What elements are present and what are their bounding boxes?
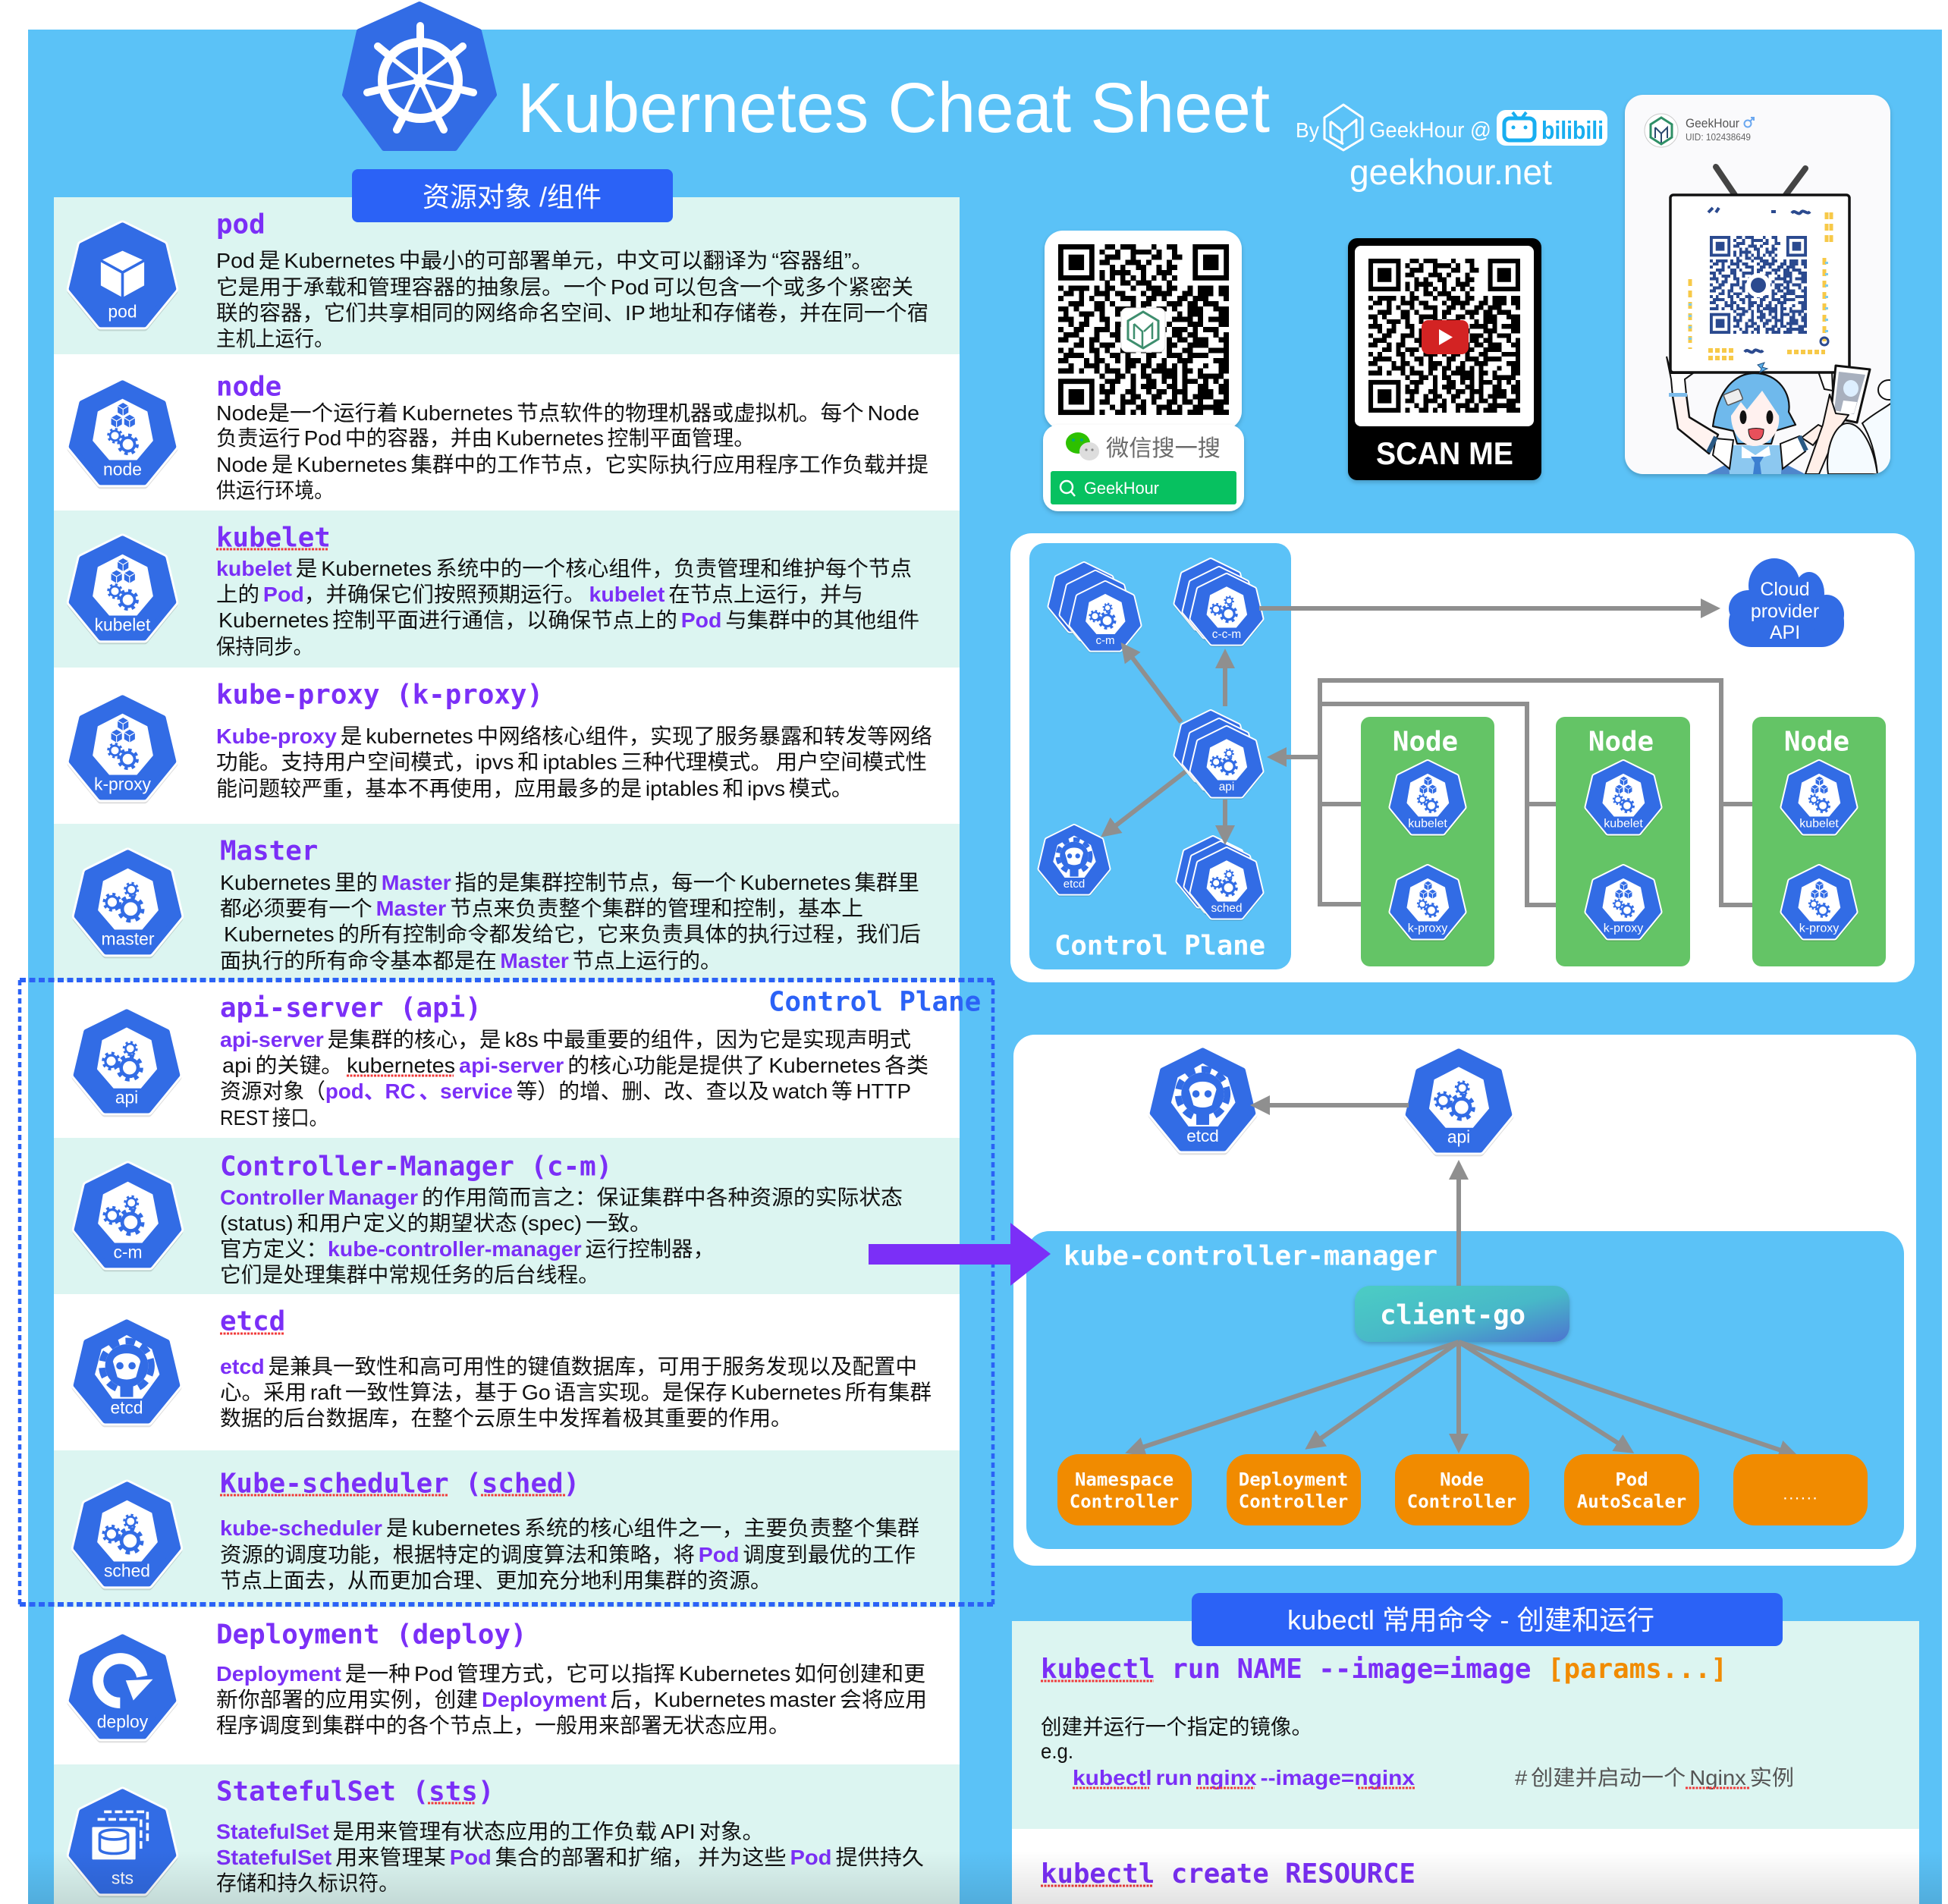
text: Deployment: Deployment 是一种 Pod 管理方式，它可以指挥 Kubernetes 如何创建和更 [216, 1662, 925, 1686]
box: namespace controller: Controller [1070, 1491, 1179, 1513]
icon: api [1408, 1051, 1510, 1152]
text: kube-scheduler [220, 1516, 919, 1592]
text: kubelet: Kubernetes 控制平面进行通信，以确保节点上的 Pod 与集群中的其他组件 [218, 608, 919, 632]
icon: etcd: etcd [1186, 1126, 1219, 1145]
text: Master: 都必须要有一个 Master 节点来负责整个集群的管理和控制，基本上 [220, 897, 863, 920]
text: kube-proxy: 能问题较严重，基本不再使用，应用最多的是 iptables 和 ipvs 模式。 [216, 777, 853, 800]
node: 1 [1361, 717, 1494, 966]
text: StatefulSet: StatefulSet 是用来管理有状态应用的工作负载 API 对象。 [216, 1820, 764, 1843]
author line: GeekHour @ [1369, 118, 1491, 143]
hair clip [1723, 388, 1743, 406]
search bar [1051, 471, 1236, 504]
panel: kube-controller-manager diagram [1013, 1035, 1916, 1566]
icon: deploy: deploy [97, 1711, 149, 1731]
text: pod: 它是用于承载和管理容器的抽象层。一个 Pod 可以包含一个或多个紧密关 [216, 275, 913, 299]
phone [1830, 366, 1870, 423]
text: StatefulSet: StatefulSet 用来管理某 Pod 集合的部署和扩缩， 并为这些 Pod 提供持久 [216, 1846, 924, 1869]
left glove [1667, 357, 1693, 396]
node: 2 [1556, 717, 1690, 966]
heading: node: node [216, 372, 281, 402]
text: api-server: REST 接口。 [220, 1106, 328, 1130]
heading: Kube-scheduler: Kube-scheduler (sched) [220, 1469, 580, 1499]
hair [1713, 373, 1796, 444]
icon: sched: sched [104, 1561, 150, 1581]
box: node controller: Controller [1407, 1491, 1516, 1513]
row: api-server [76, 992, 928, 1130]
logo: kubernetes helm [344, 4, 495, 149]
icon: master: master [102, 929, 155, 949]
icon: sts: sts [112, 1868, 134, 1888]
box: pod autoscaler: AutoScaler [1577, 1491, 1686, 1513]
panel: kubectl commands [1012, 1621, 1919, 1904]
label: control plane: Control Plane [1054, 930, 1265, 962]
heading: resources [352, 169, 673, 222]
command: kubectl run: kubectl run NAME --image=image [params...] [1041, 1654, 1727, 1685]
text: run description: 创建并运行一个指定的镜像。 [1041, 1715, 1312, 1739]
text: kube-scheduler: kube-scheduler 是 kubernetes 系统的核心组件之一，主要负责整个集群 [220, 1516, 919, 1540]
icon: kubelet [1783, 763, 1855, 834]
example command: kubectl run nginx --image=nginx [1073, 1766, 1415, 1789]
heading: kubelet: kubelet [216, 522, 331, 554]
text: api-server: api 的关键。 kubernetes api-server 的核心功能是提供了 Kubernetes 各类 [222, 1054, 928, 1077]
stack: c-m: c-m [1095, 634, 1115, 647]
box: node controller: Node [1440, 1469, 1484, 1490]
text: scan me: SCAN ME [1376, 435, 1513, 471]
icon: kubelet [1588, 763, 1659, 834]
card: bilibili profile QR [1625, 95, 1899, 474]
icon: etcd [1152, 1051, 1253, 1151]
text: api-server: 资源对象（pod、RC 、service 等）的增、删、改、查以及 watch 等 HTTP [220, 1079, 911, 1103]
bus connectors [1320, 680, 1779, 905]
example comment: # 创建并启动一个 Nginx 实例 [1515, 1766, 1794, 1789]
search bar: GeekHour [1084, 479, 1159, 498]
icon: c-m: c-m [113, 1243, 143, 1262]
collar and tie [1742, 446, 1770, 458]
author line: By [1296, 118, 1319, 142]
text: pod: 主机上运行。 [216, 327, 334, 350]
icon: bilibili badge [1497, 110, 1607, 146]
text: kube-scheduler: 节点上面去，从而更加合理、更加充分地利用集群的资源。 [220, 1569, 771, 1592]
heading: kubectl commands [1192, 1593, 1783, 1646]
box: namespace controller: Namespace [1075, 1469, 1174, 1490]
box: pod autoscaler: Pod [1615, 1469, 1648, 1490]
box: namespace controller [1057, 1454, 1192, 1525]
icon: kubelet: kubelet [1799, 818, 1839, 830]
icon: avatar [1645, 114, 1678, 147]
icon: k-proxy: k-proxy [94, 774, 152, 794]
row: statefulset [71, 1777, 924, 1895]
text: e.g.: e.g. [1041, 1739, 1073, 1763]
face [1731, 391, 1779, 446]
callout: control plane dashed box [20, 980, 993, 1604]
sleeves [1713, 438, 1733, 469]
text: node: Node 是 Kubernetes 集群中的工作节点，它实际执行应用程序工作负载并提 [216, 453, 928, 476]
text: Deployment: 程序调度到集群中的各个节点上，一般用来部署无状态应用。 [216, 1714, 790, 1737]
qr board [1670, 195, 1849, 372]
node: 2: Node [1588, 727, 1654, 757]
text: node [216, 401, 928, 502]
box: client-go [1355, 1286, 1569, 1342]
icon: master [77, 853, 179, 954]
text: search wechat: 微信搜一搜 [1106, 436, 1221, 461]
panel: cluster architecture [1010, 533, 1915, 982]
box: more: ...... [1783, 1491, 1818, 1502]
icon: etcd: etcd [111, 1398, 143, 1418]
icon: cloud provider API [1729, 558, 1844, 647]
row: kube-scheduler [76, 1469, 919, 1592]
text: Controller-Manager [220, 1186, 903, 1287]
row: controller-manager [77, 1152, 903, 1287]
box: deployment controller: Deployment [1239, 1469, 1348, 1490]
qr code [1058, 247, 1229, 413]
icon: kubelet: kubelet [1604, 818, 1643, 830]
website: geekhour.net [1349, 152, 1552, 192]
box: node controller [1395, 1454, 1529, 1525]
text: kubelet: 保持同步。 [216, 635, 313, 658]
text: pod [216, 249, 928, 350]
icon: wechat [1066, 432, 1099, 460]
icon: api [76, 1012, 178, 1113]
text: Controller-Manager: 它们是处理集群中常规任务的后台线程。 [220, 1263, 599, 1287]
icon: deploy [71, 1637, 174, 1739]
icon: play button [1422, 320, 1469, 354]
text: kubelet: 上的 Pod，并确保它们按照预期运行。 kubelet 在节点上运行，并与 [216, 583, 863, 606]
row: node [71, 372, 928, 502]
right arm [1805, 394, 1849, 474]
author line [1296, 105, 1607, 150]
text: profile name: GeekHour [1686, 116, 1739, 130]
box: pod autoscaler [1564, 1454, 1699, 1525]
icon: pod: pod [108, 302, 137, 322]
arrows: control plane links [1115, 608, 1702, 827]
command: kubectl create: kubectl create RESOURCE [1041, 1858, 1415, 1890]
icon: cloud provider API: API [1770, 622, 1800, 643]
stack: sched [1179, 838, 1261, 918]
heading: Deployment: Deployment (deploy) [216, 1619, 526, 1651]
row backgrounds [54, 197, 960, 1904]
arrow: client-go to api [1456, 1178, 1461, 1287]
illustration: mascot holding QR board [1667, 167, 1899, 474]
icon: male [1745, 118, 1754, 127]
text: kubelet: kubelet 是 Kubernetes 系统中的一个核心组件，负责管理和维护每个节点 [216, 557, 912, 580]
node: 3: Node [1784, 727, 1849, 757]
heading: Master: Master [220, 836, 318, 866]
heading: Controller-Manager: Controller-Manager (c-m) [220, 1152, 612, 1182]
text: etcd: etcd 是兼具一致性和高可用性的键值数据库，可用于服务发现以及配置中 [220, 1355, 917, 1378]
text: StatefulSet [216, 1820, 924, 1895]
text: node: 供运行环境。 [216, 479, 334, 502]
text: StatefulSet: 存储和持久标识符。 [216, 1871, 399, 1895]
label: kube-controller-manager: kube-controller-manager [1064, 1241, 1437, 1271]
row: pod [71, 209, 928, 350]
stack: sched: sched [1211, 902, 1243, 915]
panel: kube-controller-manager [1026, 1231, 1904, 1549]
stack: api: api [1219, 781, 1234, 793]
icon: etcd [1041, 827, 1108, 894]
left arm [1673, 394, 1718, 454]
icon: kubelet: kubelet [95, 615, 151, 635]
stack: c-c-m [1177, 561, 1261, 644]
text: Deployment [216, 1662, 927, 1737]
icon: cloud provider API: provider [1751, 601, 1819, 622]
heading: api-server: api-server (api) [220, 992, 482, 1024]
text: etcd: 心。采用 raft 一致性算法，基于 Go 语言实现。是保存 Kubernetes 所有集群 [220, 1381, 932, 1404]
callout: control plane dashed box: Control Plane [768, 986, 981, 1018]
icon: c-m [77, 1166, 179, 1268]
icon: cloud provider API: Cloud [1760, 579, 1810, 600]
card: WeChat QR [1043, 231, 1244, 511]
text: etcd [220, 1355, 932, 1430]
box: deployment controller: Controller [1239, 1491, 1348, 1513]
icon: api: api [115, 1088, 138, 1108]
icon: node: node [103, 460, 142, 479]
icon: k-proxy: k-proxy [1799, 922, 1839, 935]
heading: StatefulSet: StatefulSet (sts) [216, 1777, 494, 1807]
text: Controller-Manager: 官方定义：kube-controller-manager 运行控制器， [220, 1237, 715, 1261]
text: Master: Kubernetes 里的 Master 指的是集群控制节点，每一个 Kubernetes 集群里 [220, 871, 919, 894]
qr code [1368, 261, 1520, 410]
text: node: Node是一个运行着 Kubernetes 节点软件的物理机器或虚拟机。每个 Node [216, 401, 919, 425]
icon: kubelet: kubelet [1408, 818, 1447, 830]
icon: k-proxy: k-proxy [1604, 922, 1643, 935]
icon: k-proxy [1392, 868, 1463, 938]
text: Master: Kubernetes 的所有控制命令都发给它，它来负责具体的执行过程，我们后 [224, 922, 921, 946]
stack: c-c-m: c-c-m [1212, 628, 1241, 641]
heading: resources: 资源对象 /组件 [423, 181, 602, 212]
plush [1827, 423, 1877, 474]
text: Master: 面执行的所有命令基本都是在 Master 节点上运行的。 [220, 949, 721, 972]
text: Controller-Manager: Controller Manager 的作用简而言之：保证集群中各种资源的实际状态 [220, 1186, 903, 1209]
body: skirt and vest [1707, 465, 1805, 474]
text: kube-proxy [216, 724, 932, 800]
box: client-go: client-go [1380, 1300, 1525, 1331]
title: Kubernetes Cheat Sheet [517, 68, 1270, 147]
glove behind right [1818, 372, 1833, 391]
text: etcd: 数据的后台数据库，在整个云原生中发挥着极其重要的作用。 [220, 1406, 792, 1430]
text: kubelet [216, 557, 919, 658]
text: pod: Pod 是 Kubernetes 中最小的可部署单元，中文可以翻译为 “容器组”。 [216, 249, 873, 272]
heading: kube-proxy: kube-proxy (k-proxy) [216, 680, 543, 710]
row: k-proxy [71, 680, 932, 800]
icon: k-proxy [71, 698, 174, 800]
heading: etcd: etcd [220, 1306, 285, 1337]
icon: etcd [76, 1322, 178, 1423]
icon: kubelet [71, 539, 174, 640]
text: kube-proxy: 功能。支持用户空间模式，ipvs 和 iptables 三种代理模式。 用户空间模式性 [216, 750, 927, 774]
row: kubelet [71, 522, 919, 658]
panel: resources [54, 197, 960, 1904]
box: deployment controller [1227, 1454, 1361, 1525]
icon: GeekHour logo [1324, 105, 1362, 150]
node: 1: Node [1393, 727, 1458, 757]
icon: k-proxy [1783, 868, 1855, 938]
icon: bilibili badge: bilibili [1541, 116, 1604, 144]
row: master [77, 836, 921, 972]
bottom edge shadow [28, 1851, 1942, 1904]
heading: kubectl commands: kubectl 常用命令 - 创建和运行 [1287, 1604, 1654, 1635]
node: 3 [1752, 717, 1886, 966]
icon: node [71, 383, 174, 485]
text: Master [220, 871, 921, 972]
icon: k-proxy: k-proxy [1408, 922, 1447, 935]
skin right upper arm [1802, 425, 1826, 445]
box: more [1733, 1454, 1868, 1525]
row: deployment [71, 1619, 927, 1739]
heading: pod: pod [216, 209, 265, 240]
icon: QR centre logo [1121, 308, 1165, 352]
text: kube-proxy: Kube-proxy 是 kubernetes 中网络核心组件，实现了服务暴露和转发等网络 [216, 724, 932, 748]
arrows: client-go to controllers [1142, 1342, 1781, 1450]
antennae [1716, 167, 1805, 195]
icon: sts [71, 1792, 174, 1893]
icon: sched [76, 1485, 178, 1586]
icon: k-proxy [1588, 868, 1659, 938]
card: YouTube QR [1348, 238, 1541, 480]
arrow: api to etcd [1268, 1103, 1409, 1108]
text: pod: 联的容器，它们共享相同的网络命名空间、IP 地址和存储卷，并在同一个宿 [216, 301, 928, 325]
ahoge [1758, 363, 1767, 372]
stack: api [1177, 712, 1261, 796]
text: Controller-Manager: (status) 和用户定义的期望状态 (spec) 一致。 [220, 1211, 652, 1235]
panel: control plane [1029, 543, 1291, 969]
text: Deployment: 新你部署的应用实例，创建 Deployment 后，Kubernetes master 会将应用 [216, 1688, 927, 1711]
arrow: purple to controller manager [869, 1223, 1051, 1286]
icon: etcd: etcd [1064, 878, 1085, 891]
text: kube-scheduler: 资源的调度功能，根据特定的调度算法和策略，将 Pod 调度到最优的工作 [220, 1543, 916, 1566]
icon: api: api [1447, 1127, 1470, 1147]
stack: c-m [1051, 564, 1139, 650]
text: api-server [220, 1028, 928, 1130]
text: uid: UID: 102438649 [1686, 131, 1751, 143]
row: etcd [76, 1306, 932, 1430]
text: node: 负责运行 Pod 中的容器，并由 Kubernetes 控制平面管理。 [216, 426, 755, 450]
text: api-server: api-server 是集群的核心，是 k8s 中最重要的组件，因为它是实现声明式 [220, 1028, 911, 1051]
icon: kubelet [1392, 763, 1463, 834]
icon: pod [71, 225, 174, 327]
